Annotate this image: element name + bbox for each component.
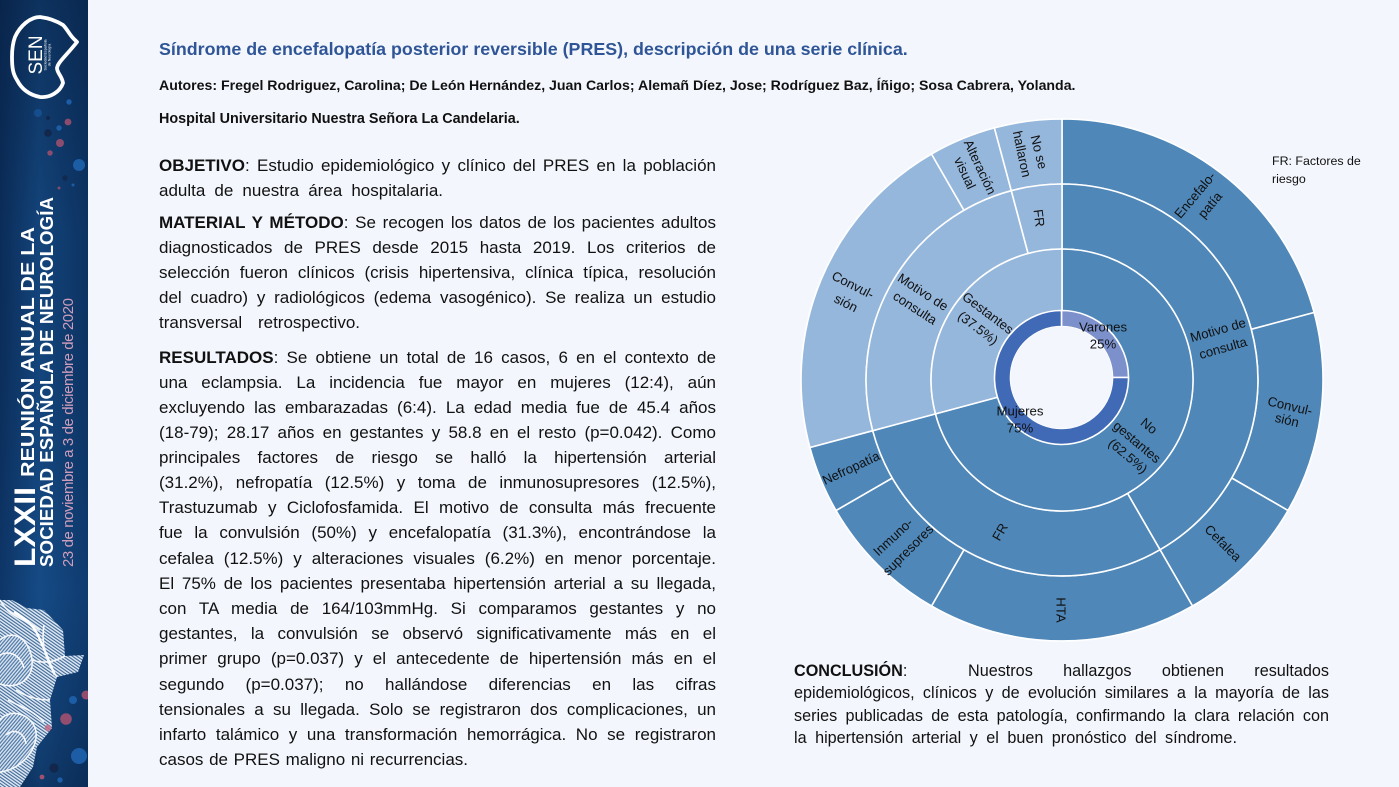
- text block: results: [159, 348, 716, 769]
- icon: SEN logo: SEN: [26, 35, 47, 75]
- text block: results: El 75% de los pacientes presentaba hipertensión arterial a su llegada,: [159, 574, 716, 593]
- hospital: Hospital Universitario Nuestra Señora La Candelaria.: [159, 111, 520, 127]
- chart labels: FR: [989, 521, 1011, 543]
- sidebar: congress banner: [0, 0, 88, 787]
- text block: conclusion: [794, 661, 1329, 747]
- chart labels: consulta: [1197, 334, 1249, 362]
- text block: material and method: del cuadro) y radiológicos (edema vasogénico). Se realiza un estudio: [159, 288, 716, 307]
- chart labels: sión: [1274, 410, 1300, 430]
- chart labels: consulta: [890, 288, 940, 328]
- decorative network dots, upper: [34, 99, 85, 190]
- text block: material and method: transversal retrospectivo.: [159, 313, 360, 332]
- legend note: FR: Factores de: [1272, 154, 1361, 168]
- text block: results: cefalea (12.5%) y alteraciones visuales (6.2%) en menor porcentaje.: [159, 549, 716, 568]
- text block: objective: [159, 156, 716, 200]
- text block: results: infarto talámico y una transformación hemorrágica. No se registraron: [159, 725, 716, 744]
- congress title: SOCIEDAD ESPAÑOLA DE NEUROLOGÍA: [36, 197, 57, 567]
- text block: results: RESULTADOS: Se obtiene un total de 16 casos, 6 en el contexto de: [159, 348, 716, 367]
- ring segments: pregnancy ring: [931, 249, 1193, 511]
- text block: results: con TA media de 164/103mmHg. Si comparamos gestantes y no: [159, 599, 716, 618]
- text block: results: excluyendo las embarazadas (6:4). La edad media fue de 45.4 años: [159, 398, 716, 417]
- text block: results: (31.2%), nefropatía (12.5%) y toma de inmunosupresores (12.5%),: [159, 473, 716, 492]
- text block: conclusion: epidemiológicos, clínicos y de evolución similares a la mayoría de las: [794, 684, 1329, 702]
- congress title: LXXII: [9, 487, 42, 567]
- chart labels: hallaron: [1010, 129, 1034, 179]
- legend note: [1272, 154, 1361, 186]
- text block: material and method: [159, 213, 716, 332]
- decorative network dots, lower: [40, 690, 90, 783]
- text block: results: fue la convulsión (50%) y encefalopatía (31.3%), encontrándose la: [159, 523, 716, 542]
- chart labels: gestantes: [1110, 418, 1164, 466]
- chart labels: Mujeres: [997, 404, 1044, 418]
- chart labels: No se: [1028, 133, 1050, 171]
- text block: conclusion: series publicadas de esta patología, confirmando la clara relación con: [794, 707, 1329, 725]
- legend note: riesgo: [1272, 172, 1306, 186]
- chart labels: Cefalea: [1202, 522, 1245, 565]
- congress title: REUNIÓN ANUAL DE LA: [17, 227, 38, 477]
- chart labels: 75%: [1007, 420, 1033, 436]
- text block: conclusion: la hipertensión arterial y el buen pronóstico del síndrome.: [794, 729, 1237, 747]
- chart labels: supresores: [880, 521, 937, 578]
- illustration: wireframe brain: [0, 600, 84, 787]
- chart labels: Alteración: [961, 137, 999, 197]
- chart labels: Gestantes: [959, 289, 1017, 337]
- text block: objective: OBJETIVO: Estudio epidemiológico y clínico del PRES en la población: [159, 156, 716, 175]
- title: Síndrome de encefalopatía posterior reversible (PRES), descripción de una serie clínica.: [159, 39, 908, 59]
- chart labels: 25%: [1090, 336, 1116, 352]
- chart labels: Convul-: [1266, 394, 1314, 418]
- ring segments: outer ring: [801, 119, 1323, 641]
- text block: results: segundo (p=0.037); no hallándose diferencias en las cifras: [159, 675, 716, 694]
- congress dates: 23 de noviembre a 3 de diciembre de 2020: [60, 298, 77, 567]
- ring segments: middle ring: [866, 184, 1258, 576]
- chart labels: Encefalo-: [1171, 169, 1219, 221]
- text block: conclusion: CONCLUSIÓN: Nuestros hallazgos obtienen resultados: [794, 662, 1329, 680]
- chart labels: visual: [951, 155, 979, 192]
- icon: SEN logo: Sociedad Española: [44, 40, 48, 70]
- text block: material and method: MATERIAL Y MÉTODO: Se recogen los datos de los pacientes adultos: [159, 213, 716, 232]
- chart labels: Motivo de: [1188, 315, 1248, 345]
- ring segments: sex ring: [994, 310, 1128, 444]
- text block: material and method: selección fueron clínicos (crisis hipertensiva, clínica típica, resolución: [159, 263, 716, 282]
- chart labels: FR: [1030, 208, 1048, 228]
- chart labels: Nefropatía: [820, 448, 883, 488]
- icon: SEN logo: [12, 17, 77, 97]
- sunburst chart: [800, 118, 1324, 642]
- chart labels: (62.5%): [1105, 435, 1151, 477]
- chart labels: Motivo de: [895, 270, 951, 314]
- authors: Autores: Fregel Rodriguez, Carolina; De León Hernández, Juan Carlos; Alemañ Díez, Jose; Rodríguez Baz, Íñigo; Sosa Cabrera, Yolanda.: [159, 77, 1075, 93]
- congress title: [9, 197, 57, 567]
- text block: results: una eclampsia. La incidencia fue mayor en mujeres (12:4), aún: [159, 373, 716, 392]
- text block: results: Trastuzumab y Ciclofosfamida. El motivo de consulta más frecuente: [159, 498, 716, 517]
- text block: material and method: diagnosticados de PRES desde 2015 hasta 2019. Los criterios de: [159, 238, 716, 257]
- icon: SEN logo: de Neurología: [48, 44, 52, 66]
- chart labels: [820, 129, 1314, 623]
- chart labels: Varones: [1079, 320, 1127, 334]
- chart labels: No: [1138, 415, 1160, 437]
- text block: results: principales factores de riesgo se halló la hipertensión arterial: [159, 448, 716, 467]
- chart labels: patía: [1195, 188, 1226, 221]
- text block: results: (18-79); 28.17 años en gestantes y 58.8 en el resto (p=0.042). Como: [159, 423, 716, 442]
- chart labels: Inmuno-: [870, 515, 916, 559]
- chart labels: (37.5%): [955, 308, 1001, 348]
- chart labels: HTA: [1054, 597, 1068, 623]
- text block: objective: adulta de nuestra área hospitalaria.: [159, 181, 443, 200]
- text block: results: gestantes, la convulsión se observó significativamente más en el: [159, 624, 716, 643]
- text block: results: primer grupo (p=0.037) y el antecedente de hipertensión más en el: [159, 649, 716, 668]
- text block: results: tensionales a su llegada. Solo se registraron dos complicaciones, un: [159, 700, 716, 719]
- text block: results: casos de PRES maligno ni recurrencias.: [159, 750, 468, 769]
- chart labels: Convul-: [829, 268, 877, 302]
- chart labels: sión: [832, 291, 860, 315]
